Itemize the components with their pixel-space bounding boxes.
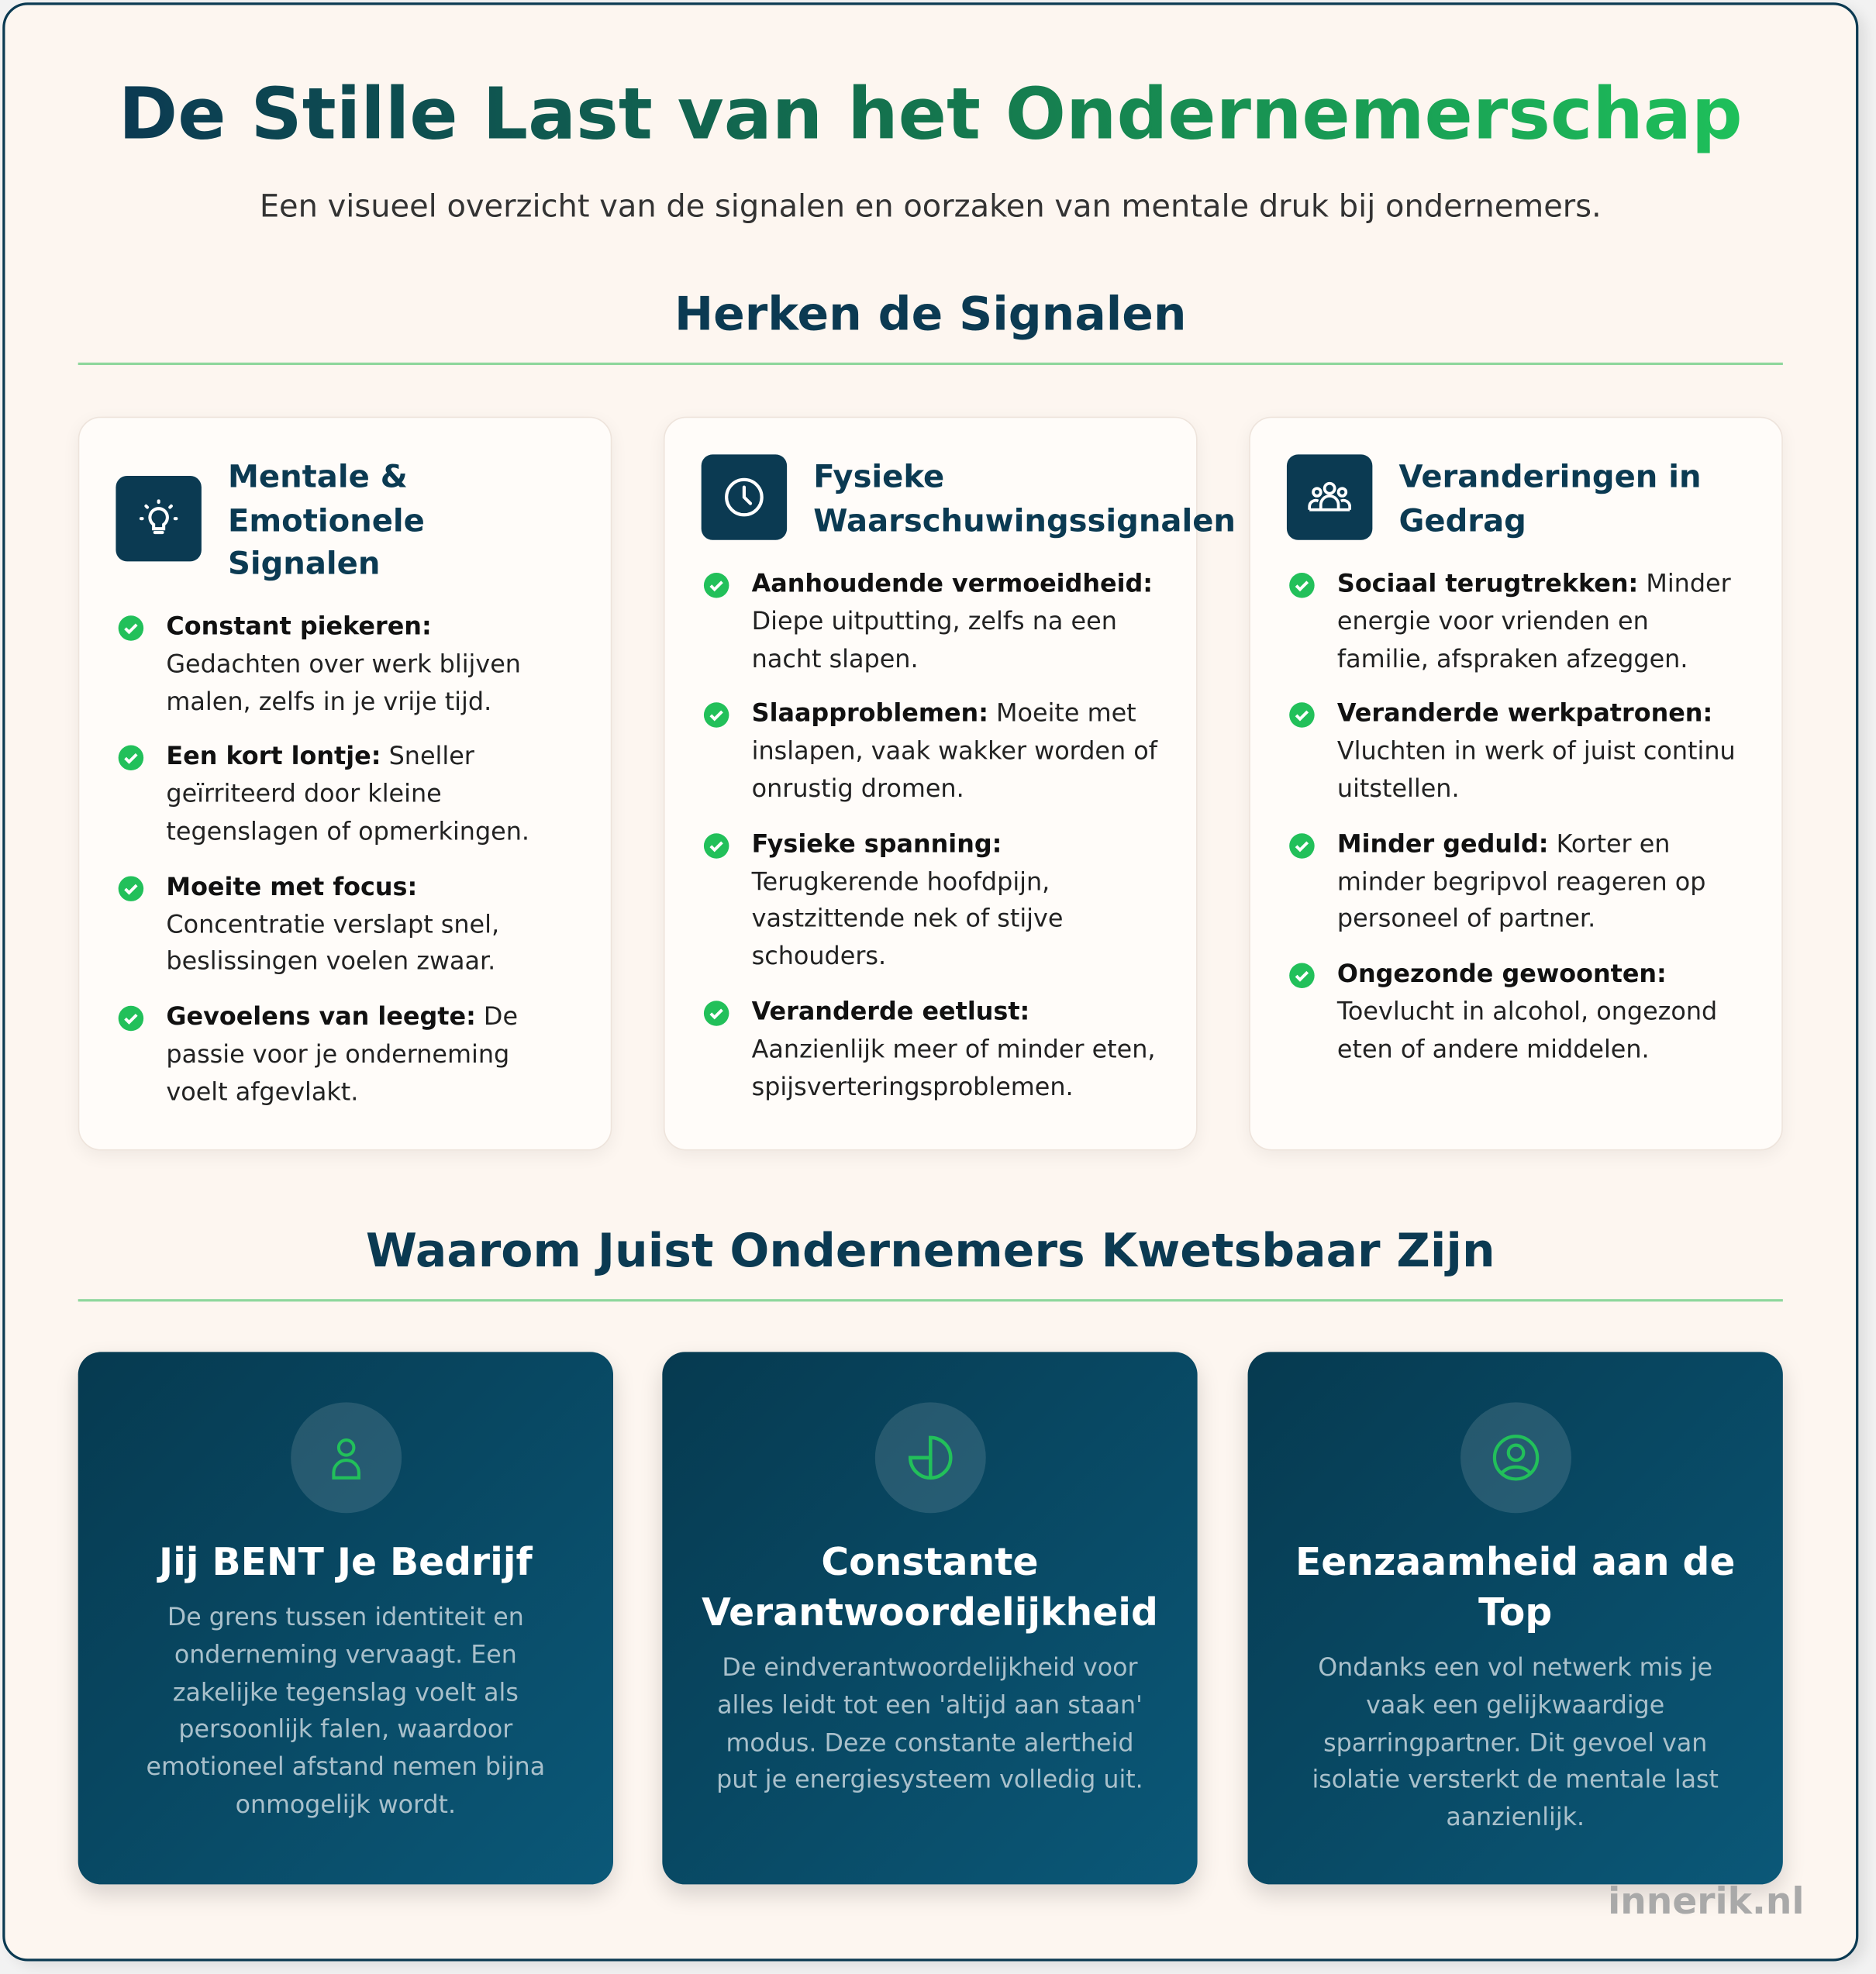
list: familie, afspraken afzeggen. [1337, 644, 1688, 673]
list: Ongezonde gewoonten: [1337, 959, 1667, 988]
icon: person [290, 1402, 401, 1513]
title [702, 1541, 1158, 1635]
title: Jij BENT Je Bedrijf [159, 1541, 533, 1585]
subtitle: Een visueel overzicht van de signalen en oorzaken van mentale druk bij ondernemers. [260, 188, 1602, 224]
icon: clock [702, 454, 787, 540]
list: spijsverteringsproblemen. [752, 1072, 1074, 1101]
list: energie voor vrienden en [1337, 607, 1649, 636]
list: Veranderde werkpatronen: [1337, 699, 1712, 728]
list: malen, zelfs in je vrije tijd. [166, 687, 491, 716]
title [1295, 1541, 1736, 1635]
icon: pie [874, 1402, 985, 1513]
title: Constante [821, 1541, 1039, 1585]
list [118, 611, 529, 1106]
heading: Gedrag [1398, 501, 1526, 538]
list: Gedachten over werk blijven [166, 649, 521, 678]
panel: Eenzaamheid [1248, 1352, 1783, 1884]
panel: Jij BENT je bedrijf [78, 1352, 613, 1884]
watermark: innerik.nl [1608, 1879, 1805, 1922]
heading: Emotionele [228, 501, 425, 538]
list: Veranderde eetlust: [752, 997, 1029, 1026]
list: Toevlucht in alcohol, ongezond [1337, 997, 1717, 1026]
heading: Fysieke [813, 458, 944, 494]
list: Vluchten in werk of juist continu [1337, 736, 1736, 766]
list: Concentratie verslapt snel, [166, 910, 499, 939]
list: Slaapproblemen: Moeite met [752, 699, 1136, 728]
list: vastzittende nek of stijve [752, 904, 1063, 933]
list [704, 569, 1158, 1101]
list: nacht slapen. [752, 644, 919, 673]
description: De eindverantwoordelijkheid voor alles leidt tot een 'altijd aan staan' modus. Deze constante alertheid put je energiesysteem volledig uit. [716, 1653, 1143, 1794]
heading: Veranderingen in [1398, 458, 1702, 494]
list: Aanhoudende vermoeidheid: [752, 569, 1153, 598]
list: schouders. [752, 942, 886, 971]
heading: Signalen [228, 545, 380, 581]
heading [228, 458, 425, 581]
list: Terugkerende hoofdpijn, [752, 866, 1050, 896]
panel: mentale signalen [78, 417, 612, 1151]
icon: user circle [1460, 1402, 1571, 1513]
list [1289, 569, 1736, 1063]
list: passie voor je onderneming [166, 1040, 509, 1069]
description: Ondanks een vol netwerk mis je vaak een gelijkwaardige sparringpartner. Dit gevoel van isolatie versterkt de mentale last aanzienlijk. [1312, 1653, 1719, 1832]
icon: lightbulb [116, 476, 202, 561]
title: De Stille Last van het Ondernemerschap [119, 73, 1743, 156]
title: Eenzaamheid aan de [1295, 1541, 1736, 1585]
list: Aanzienlijk meer of minder eten, [752, 1035, 1156, 1063]
heading: Mentale & [228, 458, 408, 494]
heading [1398, 458, 1702, 538]
list: voelt afgevlakt. [166, 1077, 358, 1106]
title: Verantwoordelijkheid [702, 1591, 1158, 1635]
list: Diepe uitputting, zelfs na een [752, 607, 1117, 636]
heading: Waarschuwingssignalen [813, 501, 1236, 538]
list: Constant piekeren: [166, 611, 432, 641]
list: personeel of partner. [1337, 904, 1595, 933]
description: De grens tussen identiteit en onderneming vervaagt. Een zakelijke tegenslag voelt als persoonlijk falen, waardoor emotioneel afstand nemen bijna onmogelijk wordt. [147, 1603, 545, 1819]
list: beslissingen voelen zwaar. [166, 947, 495, 976]
list: Een kort lontje: Sneller [166, 742, 474, 771]
list: Minder geduld: Korter en [1337, 829, 1670, 858]
list: onrustig dromen. [752, 774, 964, 803]
list: geïrriteerd door kleine [166, 780, 442, 808]
panel: Constante verantwoordelijkheid [662, 1352, 1198, 1884]
list: Gevoelens van leegte: De [166, 1002, 518, 1031]
list: tegenslagen of opmerkingen. [166, 817, 529, 846]
list: Moeite met focus: [166, 872, 417, 901]
list: inslapen, vaak wakker worden of [752, 736, 1157, 766]
list: eten of andere middelen. [1337, 1035, 1650, 1063]
heading: Waarom: Waarom Juist Ondernemers Kwetsbaar Zijn [366, 1224, 1495, 1278]
panel: gedrag [1249, 417, 1783, 1151]
title: Top [1478, 1591, 1552, 1635]
list: Fysieke spanning: [752, 829, 1002, 858]
heading [813, 458, 1236, 538]
list: minder begripvol reageren op [1337, 866, 1705, 896]
icon: group [1287, 454, 1372, 540]
list: Sociaal terugtrekken: Minder [1337, 569, 1731, 598]
list: uitstellen. [1337, 774, 1460, 803]
heading: Herken de Signalen: Herken de Signalen [674, 287, 1187, 341]
panel: fysieke signalen [664, 417, 1198, 1151]
